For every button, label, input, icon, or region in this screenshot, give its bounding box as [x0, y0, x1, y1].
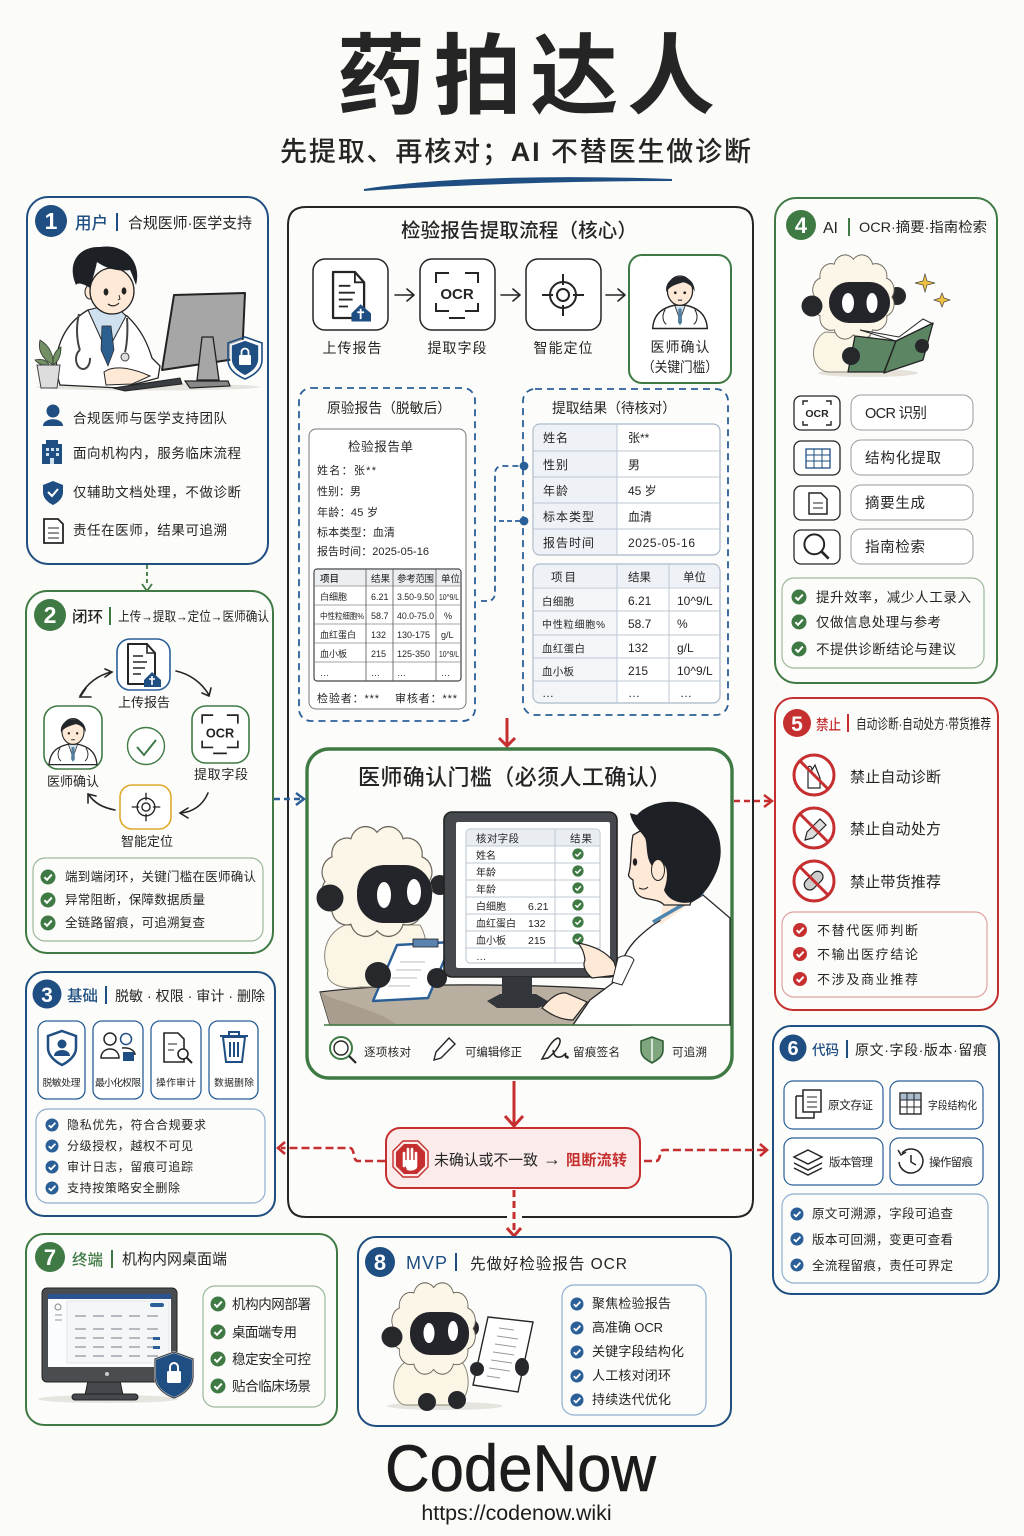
heading 3: 基础	[67, 987, 98, 1005]
loop node: locate	[120, 785, 173, 849]
arrow	[501, 289, 520, 301]
badge 4	[786, 210, 816, 240]
heading 5	[816, 714, 991, 734]
block banner: →	[543, 1149, 561, 1169]
heading 3	[67, 986, 265, 1005]
step: doctor confirm: 医师确认	[650, 339, 710, 355]
card: operation trace	[890, 1138, 983, 1185]
monitor: 结果	[570, 832, 592, 845]
stop icon	[393, 1141, 428, 1177]
panel: original report	[299, 388, 475, 721]
note box 4: 不提供诊断结论与建议	[816, 642, 956, 657]
panel 2: closed loop	[26, 591, 273, 953]
note box 3	[36, 1109, 265, 1203]
arrow: panel 1 to 2	[142, 565, 152, 591]
heading 3: 脱敏 · 权限 · 审计 · 删除	[115, 988, 265, 1004]
heading 6: 原文·字段·版本·留痕	[855, 1042, 987, 1058]
badge 5	[783, 709, 811, 737]
note box 4	[782, 578, 984, 668]
panel: original report: 10^9/L	[439, 593, 459, 602]
monitor: 年龄	[476, 883, 496, 896]
note box 4: 提升效率，减少人工录入	[816, 589, 972, 605]
badge 3: 3	[41, 984, 53, 1007]
panel: original report: 项目	[320, 574, 339, 585]
list row: responsibility	[44, 519, 227, 543]
table: fields: 标本类型	[543, 510, 594, 524]
feature: traceable	[641, 1037, 707, 1063]
panel: original report: 姓名：张**	[317, 463, 377, 477]
panel: original report: 125-350	[397, 649, 430, 659]
mascot with book	[802, 255, 950, 377]
heading 4	[823, 218, 987, 237]
panel: original report: 132	[371, 630, 386, 640]
arrow: results to gate	[499, 718, 515, 746]
table: results: 6.21	[628, 594, 652, 608]
card: source	[784, 1081, 883, 1129]
panel 3: foundation	[26, 972, 275, 1216]
step: upload report	[313, 259, 388, 356]
note box 2: 异常阻断，保障数据质量	[65, 892, 205, 907]
table: results: 单位	[683, 570, 706, 584]
arrow	[395, 289, 414, 301]
monitor: 核对字段	[476, 832, 520, 845]
heading 8: 先做好检验报告 OCR	[470, 1255, 627, 1273]
table: fields: 性别	[543, 458, 568, 472]
step: locate	[526, 259, 601, 356]
website url: https://codenow.wiki	[421, 1501, 612, 1525]
note box 7: 贴合临床场景	[232, 1379, 311, 1394]
note box 3: 支持按策略安全删除	[67, 1180, 180, 1195]
row: structured	[794, 440, 973, 475]
list row: institution: 面向机构内，服务临床流程	[73, 446, 241, 461]
table: results: 132	[628, 641, 648, 655]
table: fields: 男	[628, 458, 640, 472]
card: version	[784, 1138, 883, 1185]
subtitle underline	[364, 178, 672, 190]
panel: original report: 血红蛋白	[320, 629, 356, 640]
note box 5	[782, 912, 987, 997]
monitor: 6.21	[528, 901, 549, 913]
note box 8: 持续迭代优化	[592, 1392, 671, 1407]
panel 1: users	[27, 197, 268, 564]
note box 5: 不输出医疗结论	[817, 947, 918, 962]
note box 8	[562, 1285, 706, 1415]
panel: original report: 130-175	[397, 630, 430, 640]
panel: original report: …	[371, 668, 380, 678]
note box 8: 人工核对闭环	[592, 1368, 671, 1383]
badge 6	[780, 1034, 806, 1062]
desktop illustration	[38, 1288, 193, 1403]
step: upload report: 上传报告	[322, 340, 382, 356]
heading 2: 上传→提取→定位→医师确认	[118, 609, 269, 624]
panel: original report: 年龄：45 岁	[317, 505, 378, 519]
table: results: 白细胞	[542, 595, 574, 608]
feature: check one by one: 逐项核对	[364, 1045, 412, 1059]
table: results: 58.7	[628, 617, 652, 631]
note box 6: 版本可回溯，变更可查看	[812, 1232, 953, 1247]
table: results: 结果	[628, 571, 652, 584]
table: fields: 2025-05-16	[628, 536, 695, 550]
panel: original report: 结果	[371, 573, 391, 585]
note box 7: 机构内网部署	[232, 1297, 311, 1312]
badge 8: 8	[374, 1250, 386, 1275]
badge 7	[35, 1242, 65, 1272]
panel: original report: 215	[371, 649, 386, 659]
arrow: block to left	[278, 1142, 385, 1161]
heading 1: 合规医师·医学支持	[128, 215, 252, 232]
loop arrows	[80, 669, 211, 818]
badge 5: 5	[791, 713, 803, 736]
step: doctor confirm	[629, 255, 731, 383]
monitor	[444, 812, 617, 1008]
row: guideline: 指南检索	[865, 539, 925, 556]
panel 7: terminal	[26, 1234, 337, 1425]
arrow: gate to forbidden	[734, 795, 772, 807]
card: delete: 数据删除	[214, 1076, 254, 1089]
loop node: upload	[117, 639, 170, 710]
note box 7: 桌面端专用	[232, 1325, 297, 1340]
table: results: 10^9/L	[677, 664, 713, 678]
step: extract fields: 提取字段	[428, 340, 486, 356]
loop node: locate: 智能定位	[121, 834, 173, 849]
note box 7	[203, 1286, 325, 1407]
panel 8: MVP	[358, 1237, 731, 1426]
center check	[128, 728, 164, 764]
row: OCR: OCR	[805, 408, 829, 420]
note box 8: 关键字段结构化	[592, 1344, 684, 1359]
panel: original report: g/L	[441, 630, 454, 640]
block banner	[386, 1128, 640, 1188]
note box 6	[782, 1194, 988, 1283]
card: operation trace: 操作留痕	[929, 1155, 974, 1169]
sheep mascot	[316, 827, 450, 988]
heading 7: 机构内网桌面端	[122, 1251, 227, 1268]
feature: signature	[542, 1038, 620, 1059]
card: desensitize: 脱敏处理	[42, 1076, 81, 1089]
arrow: block to panel 8	[507, 1190, 521, 1236]
heading 8	[406, 1253, 627, 1273]
heading 4: OCR·摘要·指南检索	[859, 219, 987, 235]
forbidden: auto diagnose: 禁止自动诊断	[850, 769, 941, 786]
panel: extracted results: 提取结果（待核对）	[552, 400, 676, 416]
panel: original report: 原验报告（脱敏后）	[327, 400, 451, 416]
badge 7: 7	[44, 1245, 56, 1270]
list row: team: 合规医师与医学支持团队	[73, 411, 228, 426]
card: desensitize	[38, 1021, 85, 1099]
list row: responsibility: 责任在医师，结果可追溯	[73, 523, 227, 538]
note box 3: 审计日志，留痕可追踪	[67, 1159, 193, 1174]
note box 8: 聚焦检验报告	[592, 1296, 671, 1311]
monitor: 血小板	[476, 934, 506, 947]
book	[860, 319, 933, 342]
forbidden: promotion	[794, 861, 941, 901]
badge 4: 4	[795, 213, 808, 238]
heading 7: 终端	[72, 1251, 103, 1269]
forbidden: auto prescribe: 禁止自动处方	[850, 821, 941, 838]
panel: original report: 审核者：***	[395, 691, 458, 705]
loop node: doctor	[44, 706, 102, 789]
subtitle: 先提取、再核对；AI 不替医生做诊断	[280, 137, 751, 167]
badge 2	[34, 599, 66, 631]
heading 8: MVP	[406, 1253, 447, 1273]
table: results: 血红蛋白	[542, 642, 585, 655]
note box 5: 不替代医师判断	[817, 923, 918, 938]
monitor: 年龄	[476, 866, 496, 879]
badge 2: 2	[44, 602, 56, 628]
table: fields: 血清	[628, 510, 652, 524]
panel: original report: …	[320, 668, 329, 678]
table: fields: 张**	[628, 431, 650, 445]
feature: editable	[434, 1038, 522, 1060]
table: results: 中性粒细胞%	[542, 618, 605, 631]
loop node: extract: 提取字段	[194, 767, 248, 782]
table: results: %	[677, 617, 688, 631]
table: results: …	[542, 686, 554, 700]
heading 4: AI	[823, 220, 838, 237]
panel: extracted results	[523, 389, 728, 715]
table: fields: 报告时间	[543, 535, 594, 550]
step: extract fields	[420, 259, 495, 356]
note box 5: 不涉及商业推荐	[817, 972, 918, 987]
table: results: …	[680, 686, 692, 700]
panel: original report: 报告时间：2025-05-16	[317, 544, 429, 558]
feature: signature: 留痕签名	[573, 1045, 620, 1059]
panel: original report: 性别：男	[317, 484, 361, 498]
arrow: loop to gate	[274, 793, 304, 805]
doctor at computer illustration	[35, 246, 262, 391]
note box 6: 全流程留痕，责任可界定	[812, 1258, 953, 1273]
panel: original report: 标本类型：血清	[317, 525, 395, 539]
row: structured: 结构化提取	[865, 450, 942, 467]
loop node: upload: 上传报告	[118, 695, 170, 710]
card: field structure	[890, 1081, 983, 1129]
note box 8: 高准确 OCR	[592, 1320, 663, 1335]
loop node: extract	[192, 706, 249, 782]
panel: original report: %	[444, 611, 452, 621]
list row: assist	[43, 481, 241, 505]
note box 2: 端到端闭环，关键门槛在医师确认	[65, 869, 256, 884]
title: 药拍达人	[337, 27, 715, 126]
feature: traceable: 可追溯	[672, 1045, 707, 1059]
table: fields: 45 岁	[628, 483, 657, 498]
badge 8	[365, 1247, 395, 1277]
table: results: 10^9/L	[677, 594, 713, 608]
note box 7: 稳定安全可控	[232, 1351, 312, 1367]
table: results: 项目	[551, 571, 576, 584]
table: results	[533, 564, 720, 703]
note box 6: 原文可溯源，字段可追查	[812, 1206, 953, 1221]
arrow: gate to block	[505, 1081, 523, 1126]
heading 2: 闭环	[72, 608, 103, 626]
monitor: 132	[528, 918, 546, 930]
table: fields	[533, 424, 720, 555]
core heading: 检验报告提取流程（核心）	[401, 220, 637, 242]
monitor: 215	[528, 935, 546, 947]
clipboard	[365, 939, 452, 1001]
card: audit	[151, 1021, 201, 1099]
panel: original report: 血小板	[320, 648, 347, 659]
card: least privilege	[93, 1021, 143, 1099]
panel: original report: 6.21	[371, 592, 389, 602]
note box 2	[33, 858, 263, 941]
table: results: g/L	[677, 641, 694, 655]
badge 1	[35, 205, 67, 237]
step: locate: 智能定位	[534, 340, 592, 356]
table: results: 215	[628, 664, 648, 678]
forbidden: auto diagnose	[794, 755, 941, 795]
panel: original report: …	[441, 668, 450, 678]
gate heading: 医师确认门槛（必须人工确认）	[358, 765, 671, 790]
table: results: …	[628, 686, 640, 700]
card: field structure: 字段结构化	[928, 1098, 977, 1112]
row: OCR	[794, 395, 973, 430]
heading 6: 代码	[812, 1042, 839, 1058]
note box 3: 隐私优先，符合合规要求	[67, 1117, 206, 1132]
panel 5: forbidden	[775, 698, 998, 1010]
mascot with report	[382, 1283, 533, 1411]
row: summary: 摘要生成	[865, 494, 925, 512]
heading 6	[812, 1040, 987, 1058]
doctor figure	[542, 802, 730, 1025]
feature: check one by one	[330, 1037, 412, 1063]
card: delete	[209, 1021, 258, 1099]
row: guideline	[794, 529, 973, 564]
gate illustration	[316, 802, 730, 1025]
badge 3	[32, 980, 62, 1008]
panel: original report: 白细胞	[320, 591, 347, 602]
monitor: 白细胞	[476, 900, 506, 913]
panel: original report: 3.50-9.50	[397, 592, 434, 602]
forbidden: auto prescribe	[794, 808, 941, 848]
panel: original report: 10^9/L	[439, 650, 459, 659]
note box 4: 仅做信息处理与参考	[816, 614, 941, 630]
monitor: 姓名	[476, 849, 496, 862]
monitor: 血红蛋白	[476, 917, 516, 930]
arrow: block to right	[644, 1144, 767, 1161]
panel: original report: 中性粒细胞%	[320, 611, 364, 621]
table: results: 血小板	[542, 665, 574, 678]
panel 4: AI	[775, 198, 997, 683]
panel: original report: 检验报告单	[348, 439, 413, 454]
heading 7	[72, 1250, 227, 1269]
loop node: doctor: 医师确认	[47, 774, 99, 789]
list row: institution	[42, 440, 241, 464]
panel: original report: 参考范围	[397, 573, 434, 585]
heading 1	[75, 213, 252, 233]
panel: doctor confirmation gate	[307, 749, 732, 1078]
heading 2	[72, 607, 269, 626]
brand logo text: CodeNow	[385, 1431, 656, 1505]
block banner: 未确认或不一致	[434, 1152, 538, 1169]
table: fields: 年龄	[543, 484, 568, 498]
row: OCR: OCR 识别	[865, 405, 927, 422]
badge 6: 6	[787, 1038, 799, 1060]
forbidden: promotion: 禁止带货推荐	[850, 874, 941, 891]
heading 1: 用户	[75, 214, 108, 233]
card: source: 原文存证	[828, 1098, 874, 1112]
panel: original report: 40.0-75.0	[397, 611, 434, 621]
panel 6: code	[773, 1026, 999, 1294]
block banner: 阻断流转	[566, 1151, 627, 1169]
card: audit: 操作审计	[156, 1076, 196, 1089]
chair	[678, 972, 730, 1025]
table: fields: 姓名	[543, 430, 568, 445]
step: doctor confirm: （关键门槛）	[642, 359, 718, 375]
row: summary	[794, 485, 973, 520]
panel: core extraction flow	[288, 207, 753, 1236]
connector: report to results	[481, 462, 528, 601]
panel: original report: …	[397, 668, 406, 678]
card: least privilege: 最小化权限	[95, 1076, 141, 1089]
monitor: …	[476, 951, 486, 963]
feature: editable: 可编辑修正	[465, 1045, 522, 1059]
list row: team	[43, 404, 228, 426]
badge 1: 1	[45, 208, 58, 234]
note box 2: 全链路留痕，可追溯复查	[65, 915, 205, 930]
card: version: 版本管理	[829, 1155, 874, 1169]
panel: original report: 单位	[441, 573, 461, 585]
panel: original report: 检验者：***	[317, 691, 380, 705]
arrow	[606, 289, 625, 301]
heading 5: 禁止	[816, 717, 841, 734]
panel: original report: 58.7	[371, 611, 389, 621]
note box 3: 分级授权，越权不可见	[67, 1138, 193, 1153]
list row: assist: 仅辅助文档处理，不做诊断	[73, 485, 241, 500]
